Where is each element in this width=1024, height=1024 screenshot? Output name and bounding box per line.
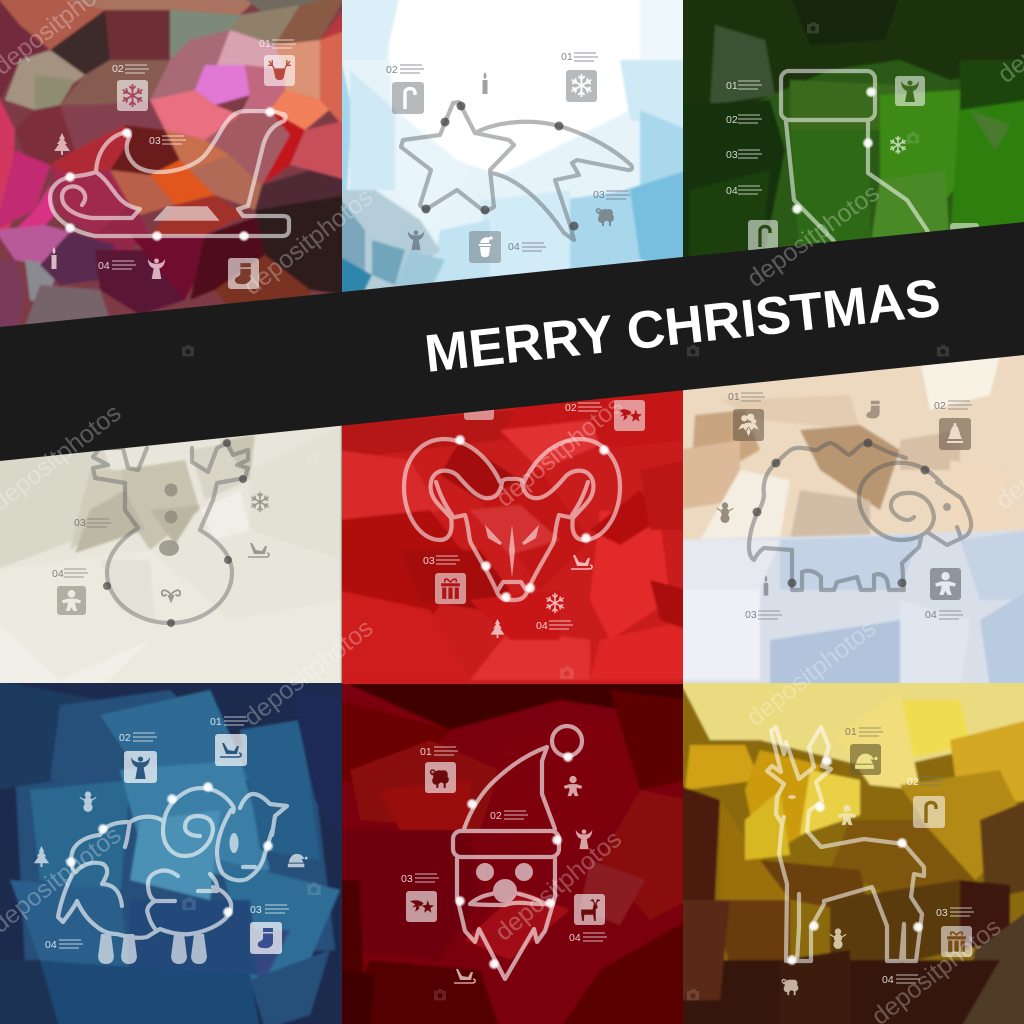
label 02: 02 — [119, 732, 131, 744]
icon: sleigh badge — [215, 734, 247, 766]
label 02: 02 — [386, 64, 398, 76]
label 03 — [423, 555, 460, 567]
connection dots: woolly sheep — [65, 781, 274, 918]
icon: holly badge — [733, 409, 764, 441]
line art: snowman — [93, 443, 248, 623]
icon: ram — [162, 590, 180, 603]
line art: stocking — [781, 71, 935, 265]
icon: santa badge — [469, 231, 501, 263]
icon: angel badge — [895, 76, 925, 106]
icon: reindeer badge — [264, 55, 295, 86]
watermarks: depositphotos — [491, 391, 628, 513]
line art: santa — [453, 726, 582, 979]
icon: clipped badge — [950, 223, 979, 253]
watermarks: depositphotos — [741, 614, 881, 732]
connection dots: santa — [454, 751, 574, 970]
icon: clipped badge — [464, 395, 494, 420]
label 02: 02 — [112, 63, 124, 75]
icon: angel — [408, 230, 424, 250]
line art: deer — [767, 727, 924, 961]
polygon background: star panel — [337, 0, 688, 305]
label 04 — [98, 260, 136, 272]
label 02: 02 — [565, 402, 577, 414]
connection dots: sheep — [752, 438, 930, 588]
label 04: 04 — [925, 609, 937, 621]
line art: sleigh — [50, 111, 289, 236]
panel: stocking — [678, 0, 1024, 275]
polygon background: snowman panel — [0, 420, 342, 688]
icon: snowflake — [546, 593, 564, 613]
label 02 — [934, 400, 972, 412]
icon: stocking badge — [228, 258, 259, 289]
icon: sleigh — [248, 543, 269, 557]
label 02: 02 — [490, 810, 502, 822]
line art: ram head — [404, 439, 620, 600]
label 04 — [536, 620, 573, 632]
label 03: 03 — [745, 609, 757, 621]
label 03: 03 — [74, 517, 86, 529]
polygon background: ram head panel — [337, 380, 688, 689]
connection dots: sleigh — [64, 106, 276, 242]
label 04 — [508, 241, 546, 253]
icon: snowflake badge — [117, 80, 148, 111]
label 03 — [726, 149, 762, 161]
icon: sheep badge — [425, 762, 456, 793]
icon: tree — [54, 133, 70, 155]
label 04: 04 — [52, 568, 64, 580]
label 03: 03 — [401, 873, 413, 885]
label 03 — [745, 609, 782, 621]
icon: sheep — [782, 980, 798, 995]
label 01: 01 — [259, 38, 271, 50]
icon: gingerbread — [564, 776, 582, 796]
label 01 — [561, 51, 598, 63]
polygon background: stocking panel — [678, 0, 1024, 275]
label 04 — [726, 185, 762, 197]
watermarks: depositphotos — [238, 183, 378, 301]
label 03 — [936, 907, 974, 919]
label 01: 01 — [210, 716, 222, 728]
title: MERRY CHRISTMAS — [422, 268, 943, 384]
panel: sleigh — [0, 0, 347, 340]
label 04: 04 — [45, 939, 57, 951]
icon: angel badge — [124, 751, 157, 783]
icon: candle — [482, 72, 488, 94]
icon: gingerbread — [838, 805, 856, 825]
buttons: snowman — [159, 484, 179, 556]
icon: snowflake badge — [566, 70, 597, 102]
label 01 — [210, 716, 248, 728]
line art: star and tail — [401, 102, 632, 240]
label 03 — [74, 517, 111, 529]
line art: sheep — [749, 443, 971, 590]
connection dots: star — [422, 102, 578, 230]
label 02 — [386, 64, 424, 76]
icon: sleigh — [571, 555, 592, 569]
label 02: 02 — [907, 776, 919, 788]
watermarks: depositphotos — [490, 825, 627, 947]
icon: snowflake — [890, 136, 906, 154]
camera watermark icons — [182, 22, 949, 1000]
icon: star badge — [406, 891, 437, 922]
connection dots: deer — [786, 755, 924, 966]
icon: candy cane badge — [748, 220, 778, 252]
label 04: 04 — [726, 185, 738, 197]
label 03 — [593, 189, 630, 201]
label 02: 02 — [726, 114, 738, 126]
label 02 — [112, 63, 149, 75]
polygon background: woolly sheep panel — [0, 678, 347, 1024]
polygon background: sleigh panel — [0, 0, 347, 340]
icon: tree — [490, 619, 504, 638]
label 04 — [569, 932, 607, 944]
icon: gingerbread badge — [930, 568, 961, 600]
icon: candy cane badge — [392, 82, 424, 114]
icon: snowman — [830, 928, 846, 949]
label 04 — [882, 974, 920, 986]
label 03 — [401, 873, 439, 885]
icon: sheep — [596, 209, 614, 226]
label 02 — [907, 776, 945, 788]
label 01: 01 — [561, 51, 573, 63]
icon: deer badge — [574, 894, 605, 925]
icon: snowman — [717, 502, 733, 523]
panel: deer — [678, 678, 1024, 1024]
banner — [0, 222, 1024, 461]
label 03: 03 — [593, 189, 605, 201]
label 04: 04 — [569, 932, 581, 944]
icon: santa hat badge — [850, 744, 881, 775]
icon: stocking — [866, 401, 880, 418]
panel: santa — [337, 679, 688, 1024]
label 03: 03 — [936, 907, 948, 919]
icon: star badge — [614, 400, 645, 431]
icon: candle — [52, 247, 56, 269]
label 02 — [490, 810, 528, 822]
connection dots: stocking — [791, 86, 877, 215]
polygon background: santa panel — [337, 679, 688, 1024]
label 01: 01 — [726, 80, 738, 92]
icon: bell badge — [939, 418, 971, 450]
icon: stocking badge — [250, 922, 282, 954]
watermarks: depositphotos — [238, 614, 378, 732]
label 02 — [726, 114, 762, 126]
icon: candle — [764, 575, 768, 596]
label 04: 04 — [536, 620, 548, 632]
label 01: 01 — [420, 746, 432, 758]
label 02 — [119, 732, 157, 744]
label 04 — [925, 609, 963, 621]
label 03: 03 — [423, 555, 435, 567]
label 04 — [52, 568, 88, 580]
icon: angel — [576, 829, 592, 849]
label 03: 03 — [250, 904, 262, 916]
icon: snowman — [80, 791, 96, 812]
icon: gift badge — [435, 573, 466, 604]
polygon background: sheep outline panel — [678, 345, 1024, 688]
panel: shooting star — [337, 0, 688, 305]
panel: woolly sheep — [0, 678, 347, 1024]
label 01 — [728, 391, 765, 403]
icon: snowflake — [251, 492, 269, 512]
label 02 — [565, 402, 602, 414]
icon: sleigh — [454, 969, 475, 983]
connection dots: ram head — [454, 434, 610, 603]
icon: gift badge — [941, 926, 972, 957]
line art: woolly sheep — [58, 788, 287, 964]
icon: gingerbread badge — [57, 586, 86, 615]
label 01 — [845, 726, 883, 738]
connection dots: snowman — [103, 439, 247, 627]
label 03 — [250, 904, 289, 916]
label 01 — [420, 746, 458, 758]
label 03 — [149, 135, 186, 147]
panel: ram head — [337, 380, 688, 689]
icon: candy cane badge — [913, 796, 945, 828]
watermarks: depositphotos — [742, 179, 884, 293]
label 01 — [259, 38, 296, 50]
label 01 — [726, 80, 762, 92]
panel: snowman — [0, 420, 342, 688]
icon: angel — [148, 258, 165, 279]
panel: sheep outline — [678, 345, 1024, 688]
label 04 — [45, 939, 83, 951]
polygon background: deer panel — [678, 678, 1024, 1024]
label 02: 02 — [934, 400, 946, 412]
label 04: 04 — [882, 974, 894, 986]
label 04: 04 — [508, 241, 520, 253]
icon: tree — [34, 846, 49, 867]
label 03: 03 — [726, 149, 738, 161]
label 04: 04 — [98, 260, 110, 272]
label 03: 03 — [149, 135, 161, 147]
label 01: 01 — [845, 726, 857, 738]
label 01: 01 — [728, 391, 740, 403]
icon: santa hat — [288, 854, 308, 867]
